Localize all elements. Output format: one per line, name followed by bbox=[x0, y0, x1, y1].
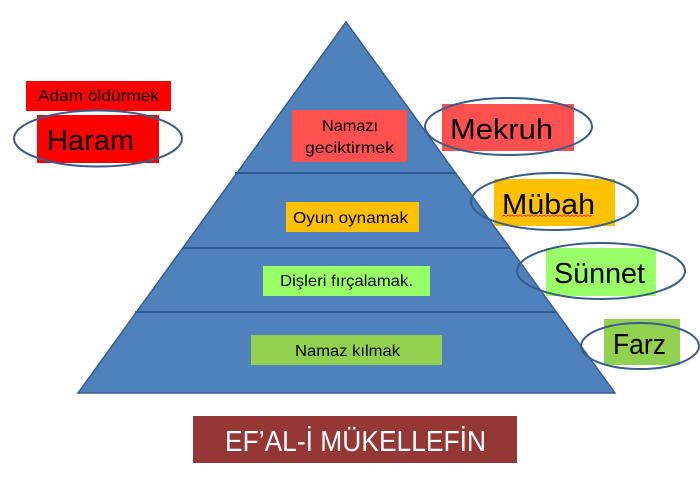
pyramid label: Dişleri fırçalamak: Dişleri fırçalamak. bbox=[280, 273, 413, 290]
category: Farz bbox=[581, 319, 699, 369]
category: Sünnet: Sünnet bbox=[554, 258, 645, 290]
pyramid label: Namazı geciktirmek: geciktirmek bbox=[305, 140, 395, 157]
pyramid label: Oyun oynamak bbox=[286, 202, 419, 232]
category: Mekruh bbox=[425, 98, 592, 155]
category: Haram: Haram bbox=[47, 125, 134, 157]
example label: Adam öldürmek: Adam öldürmek bbox=[38, 88, 160, 105]
category: Farz: Farz bbox=[613, 329, 666, 361]
category: Mekruh: Mekruh bbox=[450, 114, 553, 146]
title: EF’AL-İ MÜKELLEFİN bbox=[225, 425, 486, 458]
category: Mübah: Mübah bbox=[502, 189, 595, 221]
title bbox=[193, 416, 517, 463]
category: Sünnet bbox=[517, 243, 685, 299]
pyramid bbox=[78, 22, 615, 393]
category: Mübah bbox=[471, 173, 638, 230]
category: Haram bbox=[14, 110, 182, 166]
pyramid label: Namazı geciktirmek bbox=[292, 110, 407, 162]
pyramid label: Dişleri fırçalamak bbox=[263, 266, 430, 296]
pyramid label: Namaz kılmak bbox=[251, 335, 442, 365]
example label: Adam öldürmek bbox=[26, 81, 171, 111]
pyramid label: Namazı geciktirmek: Namazı bbox=[322, 118, 378, 135]
pyramid label: Oyun oynamak: Oyun oynamak bbox=[293, 210, 409, 227]
pyramid label: Namaz kılmak: Namaz kılmak bbox=[295, 343, 401, 360]
